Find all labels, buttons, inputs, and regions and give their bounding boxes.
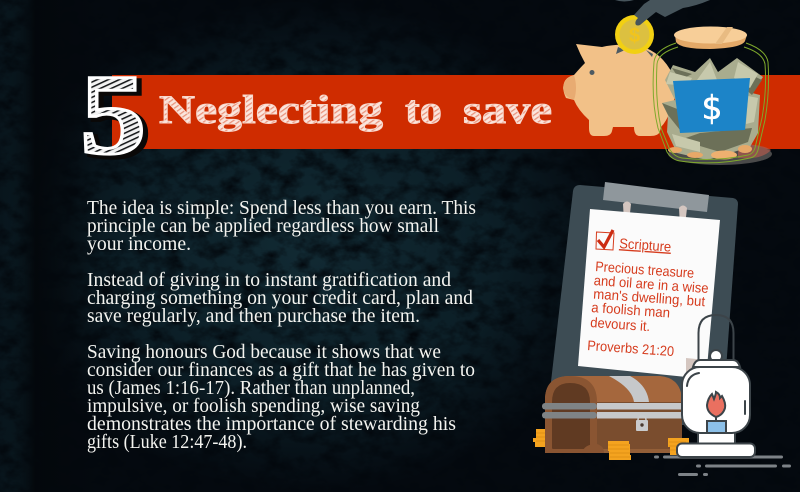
icon: gold coin <box>615 15 654 54</box>
icon: money jar <box>653 26 772 165</box>
verse: and oil are in a wise <box>593 272 709 296</box>
title: save <box>463 87 552 132</box>
verse reference: Proverbs 21:20 <box>587 337 675 359</box>
red title band <box>112 75 800 149</box>
paragraph: instead of: Instead of giving in to instant gratification and <box>87 270 451 291</box>
flame <box>707 392 725 417</box>
number 5: 5 <box>84 54 150 181</box>
paragraph: saving honours God: Saving honours God because it shows that we <box>87 342 441 363</box>
rings <box>621 202 688 230</box>
title: to <box>405 87 442 132</box>
icon: lantern <box>677 315 755 457</box>
icon: coin stacks <box>533 429 689 460</box>
ground dashes <box>654 456 791 476</box>
jar money <box>662 58 763 160</box>
paragraph: saving honours God <box>87 342 475 453</box>
paper <box>578 209 720 379</box>
paragraph: saving honours God: demonstrates the importance of stewarding his <box>87 414 456 435</box>
verse <box>590 258 709 334</box>
icon: treasure chest <box>542 376 682 453</box>
verse: a foolish man <box>591 299 671 321</box>
title: Neglecting <box>159 87 383 132</box>
paragraph: the idea: principle can be applied regardless how small <box>87 216 440 237</box>
clipboard <box>546 182 738 425</box>
paragraph: the idea: your income. <box>87 234 191 255</box>
chest lock <box>636 416 648 431</box>
checkbox icon <box>596 230 614 250</box>
paragraph: the idea: The idea is simple: Spend less than you earn. This <box>87 198 476 219</box>
body text <box>87 198 476 453</box>
clipboard clip <box>603 182 709 212</box>
clipboard board <box>546 185 738 425</box>
paper fold <box>686 358 706 379</box>
verse: Precious treasure <box>595 258 695 281</box>
title <box>159 87 552 132</box>
verse: man's dwelling, but <box>593 286 706 309</box>
paragraph: saving honours God: consider our finances as a gift that he has given to <box>87 360 475 381</box>
paragraph: saving honours God: us (James 1:16-17). Rather than unplanned, <box>87 378 415 399</box>
icon: piggy bank <box>563 44 675 136</box>
jar glass outline <box>653 43 769 163</box>
number 5: 5 <box>80 51 146 178</box>
paragraph: saving honours God: gifts (Luke 12:47-48). <box>87 432 247 453</box>
paragraph: saving honours God: impulsive, or foolish spending, wise saving <box>87 396 420 417</box>
verse: devours it. <box>590 314 651 334</box>
paragraph: instead of <box>87 270 473 327</box>
scripture heading: Scripture <box>619 235 672 255</box>
jar label: $ <box>702 88 722 127</box>
icon: hand holding coin <box>615 0 710 26</box>
paragraph: the idea <box>87 198 476 255</box>
jar lid <box>674 26 747 49</box>
paragraph: instead of: save regularly, and then purchase the item. <box>87 306 420 327</box>
paragraph: instead of: charging something on your credit card, plan and <box>87 288 473 309</box>
chest bands <box>542 403 597 410</box>
icon: gold coin: $ <box>629 25 640 47</box>
